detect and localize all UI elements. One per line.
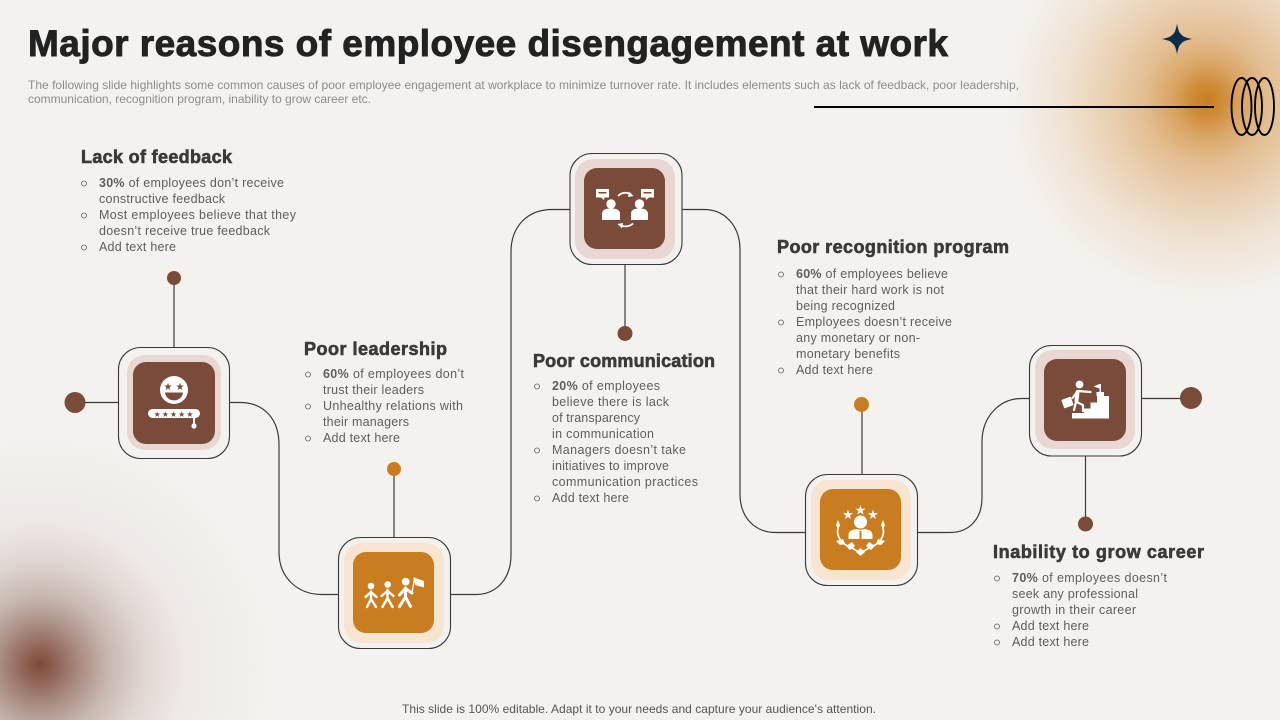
icon: two people exchanging messages	[596, 189, 654, 228]
card: inability to grow icon	[1030, 346, 1142, 456]
subtitle: communication, recognition program, inability to grow career etc.	[28, 92, 371, 106]
text block: poor leadership: trust their leaders	[323, 383, 424, 397]
text block: poor communication: Managers doesn’t take	[552, 443, 686, 457]
icon: employee with stars and laurel: ★	[842, 508, 854, 523]
text block: inability to grow career: Inability to grow career	[993, 542, 1204, 562]
bottom-left brown glow	[0, 430, 275, 720]
text block: poor recognition program: that their hard work is not	[796, 283, 945, 297]
text block: poor communication: Add text here	[552, 491, 629, 505]
text block: poor communication: initiatives to improve	[552, 459, 669, 473]
text block: poor leadership: 60% of employees don’t	[323, 367, 465, 381]
text block: poor recognition program: Poor recognition program	[777, 237, 1009, 257]
text block: inability to grow career: 70% of employees doesn’t	[1012, 571, 1168, 585]
text block: poor recognition program: 60% of employees believe	[796, 267, 948, 281]
text block: lack of feedback: doesn’t receive true feedback	[99, 224, 271, 238]
icon: smiley with star rating: ★	[164, 382, 173, 393]
text block: lack of feedback: Most employees believe that they	[99, 208, 297, 222]
icon: smiley with star rating: ★	[176, 382, 185, 393]
text block: poor leadership: Unhealthy relations with	[323, 399, 463, 413]
marker: poor leadership dot	[387, 462, 401, 538]
text block: inability to grow career: Add text here	[1012, 635, 1089, 649]
text block: poor communication: in communication	[552, 427, 654, 441]
icon: smiley with star rating	[148, 376, 200, 429]
text block: poor communication	[533, 351, 715, 505]
icon: employee with stars and laurel: ★	[855, 504, 866, 518]
title: Major reasons of employee disengagement at work	[28, 23, 948, 64]
text block: poor recognition program: Add text here	[796, 363, 873, 377]
marker: poor recognition dot	[854, 397, 869, 475]
text block: inability to grow career: seek any professional	[1012, 587, 1138, 601]
footer note: This slide is 100% editable. Adapt it to your needs and capture your audience's attention.	[402, 702, 876, 716]
text block: lack of feedback: Add text here	[99, 240, 176, 254]
icon: climbing stairs to flag	[1061, 381, 1109, 418]
icon: smiley with star rating: ★★★★★	[154, 410, 194, 419]
text block: poor recognition program: Employees doesn’t receive	[796, 315, 952, 329]
marker: left start dot	[64, 392, 119, 413]
text block: lack of feedback	[81, 147, 297, 254]
text block: lack of feedback: constructive feedback	[99, 192, 226, 206]
card: poor leadership icon	[338, 538, 450, 648]
marker: poor communication dot	[618, 265, 632, 341]
icon: three walking people with flag	[366, 578, 424, 607]
text block: poor recognition program: any monetary or non-	[796, 331, 920, 345]
card: poor recognition icon	[806, 474, 918, 586]
subtitle	[28, 78, 1019, 106]
text block: poor leadership: Poor leadership	[304, 339, 447, 359]
text block: poor recognition program: being recognized	[796, 299, 895, 313]
text block: poor communication: Poor communication	[533, 351, 715, 371]
text block: inability to grow career	[993, 542, 1204, 649]
marker: lack of feedback dot	[167, 271, 181, 348]
text block: poor recognition program	[777, 237, 1009, 377]
card: poor communication icon	[570, 154, 682, 264]
text block: poor recognition program: monetary benefits	[796, 347, 900, 361]
subtitle: The following slide highlights some common causes of poor employee engagement at workplace to minimize turnover rate. It includes elements such as lack of feedback, poor leadership,	[28, 78, 1019, 92]
top-right orange glow	[1000, 0, 1280, 305]
marker: right end dot	[1141, 387, 1202, 409]
decoration: star, rule and rings	[814, 24, 1274, 135]
text block: poor leadership: their managers	[323, 415, 409, 429]
connector path	[230, 210, 1030, 594]
text block: poor communication: believe there is lack	[552, 395, 670, 409]
text block: poor communication: 20% of employees	[552, 379, 660, 393]
card: lack of feedback icon	[118, 348, 230, 458]
text block: poor communication: of transparency	[552, 411, 641, 425]
icon: employee with stars and laurel: ★	[867, 508, 879, 523]
text block: lack of feedback: Lack of feedback	[81, 147, 233, 167]
icon: employee with stars and laurel	[836, 504, 885, 556]
text block: inability to grow career: growth in their career	[1012, 603, 1136, 617]
text block: poor communication: communication practices	[552, 475, 698, 489]
text block: inability to grow career: Add text here	[1012, 619, 1089, 633]
text block: lack of feedback: 30% of employees don’t receive	[99, 176, 284, 190]
marker: inability to grow dot	[1078, 456, 1093, 532]
text block: poor leadership: Add text here	[323, 431, 400, 445]
text block: poor leadership	[304, 339, 465, 445]
